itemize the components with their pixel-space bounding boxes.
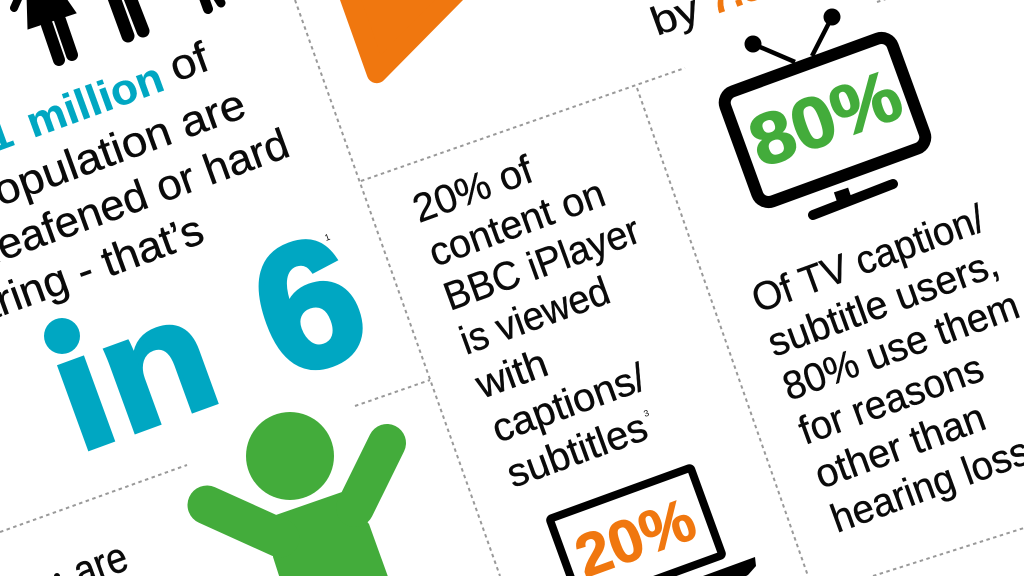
text block: BBC iPlayer: with <box>469 341 554 408</box>
text block: deaf population: 1 <box>323 232 331 243</box>
text block: BBC iPlayer: captions/ <box>486 355 652 451</box>
text block: BBC iPlayer: subtitles <box>501 405 653 496</box>
text block: deaf population: million <box>20 54 170 147</box>
text block: BBC iPlayer: is viewed <box>454 269 616 363</box>
text block: TV caption users: for reasons <box>793 346 989 453</box>
text block: TV caption users: Of TV caption/ <box>746 196 991 321</box>
statistic: 1 in 6: 6 <box>228 195 389 416</box>
icon: television showing 80% <box>721 8 929 215</box>
text block: deaf population: of <box>163 33 216 91</box>
text block: BBC iPlayer: 3 <box>642 408 650 419</box>
icon: green person with raised arms <box>207 412 400 576</box>
icon: laptop showing 20% <box>550 468 756 576</box>
text block: TV caption users <box>746 196 1024 541</box>
text block: BBC iPlayer: 20% of <box>407 147 539 231</box>
text block: BBC iPlayer <box>407 147 653 496</box>
text fragment: by 7.5 <box>645 0 769 44</box>
statistic: 1 in 6: in <box>27 259 239 487</box>
statistic: 1 in 6 <box>27 195 389 487</box>
text block: TV caption users: other than <box>809 395 991 497</box>
icon: row of people <box>14 0 221 60</box>
text block: deaf population <box>0 33 331 350</box>
text block: BBC iPlayer: content on <box>423 171 611 275</box>
icon: orange triangle <box>344 0 469 73</box>
text block: TV caption users: subtitle users, <box>762 241 1004 365</box>
text block: BBC iPlayer: BBC iPlayer <box>438 208 646 319</box>
icon: television showing 80%: 80% <box>739 55 912 183</box>
